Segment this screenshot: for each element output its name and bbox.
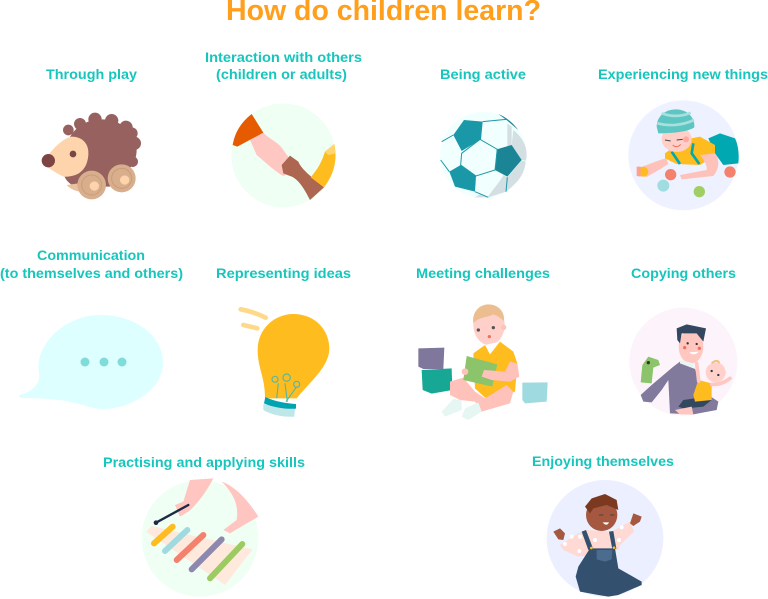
icon: toy hedgehog [42, 113, 141, 199]
heading: enjoying themselves: Enjoying themselves [532, 453, 674, 469]
heading: copying others: Copying others [631, 265, 736, 281]
heading: being active: Being active [440, 66, 526, 82]
panel: copying others [629, 265, 737, 416]
heading: representing ideas: Representing ideas [216, 265, 351, 281]
icon: crawling baby with balls [628, 100, 739, 210]
heading: interaction with others [205, 49, 362, 82]
panel: experiencing new things [598, 66, 768, 210]
icon: baby with blocks [418, 304, 548, 420]
heading: meeting challenges: Meeting challenges [416, 265, 550, 281]
panel: representing ideas [216, 265, 351, 417]
panel: meeting challenges [416, 265, 550, 420]
icon: football [440, 112, 527, 198]
heading: interaction with others: Interaction with others [205, 49, 362, 65]
heading: experiencing new things: Experiencing new things [598, 66, 768, 82]
heading: communication [0, 247, 183, 281]
heading: communication: (to themselves and others) [0, 265, 183, 281]
icon: light bulb [241, 309, 329, 417]
icon: speech bubble [19, 315, 163, 409]
icon: holding hands [231, 103, 336, 207]
heading: through play: Through play [46, 66, 137, 82]
panel: enjoying themselves [532, 453, 674, 597]
panel: practising and applying skills [103, 454, 305, 597]
icon: man with puppet and baby [629, 308, 737, 416]
icon: smiling toddler [547, 480, 663, 597]
heading: practising and applying skills: Practising and applying skills [103, 454, 305, 470]
icon: hands playing xylophone [142, 478, 258, 597]
panel: interaction with others [205, 49, 362, 207]
heading: communication: Communication [37, 247, 145, 263]
panel: being active [440, 66, 527, 198]
panel: communication [0, 247, 183, 409]
panel: through play [42, 66, 141, 199]
heading: interaction with others: (children or adults) [216, 66, 347, 82]
